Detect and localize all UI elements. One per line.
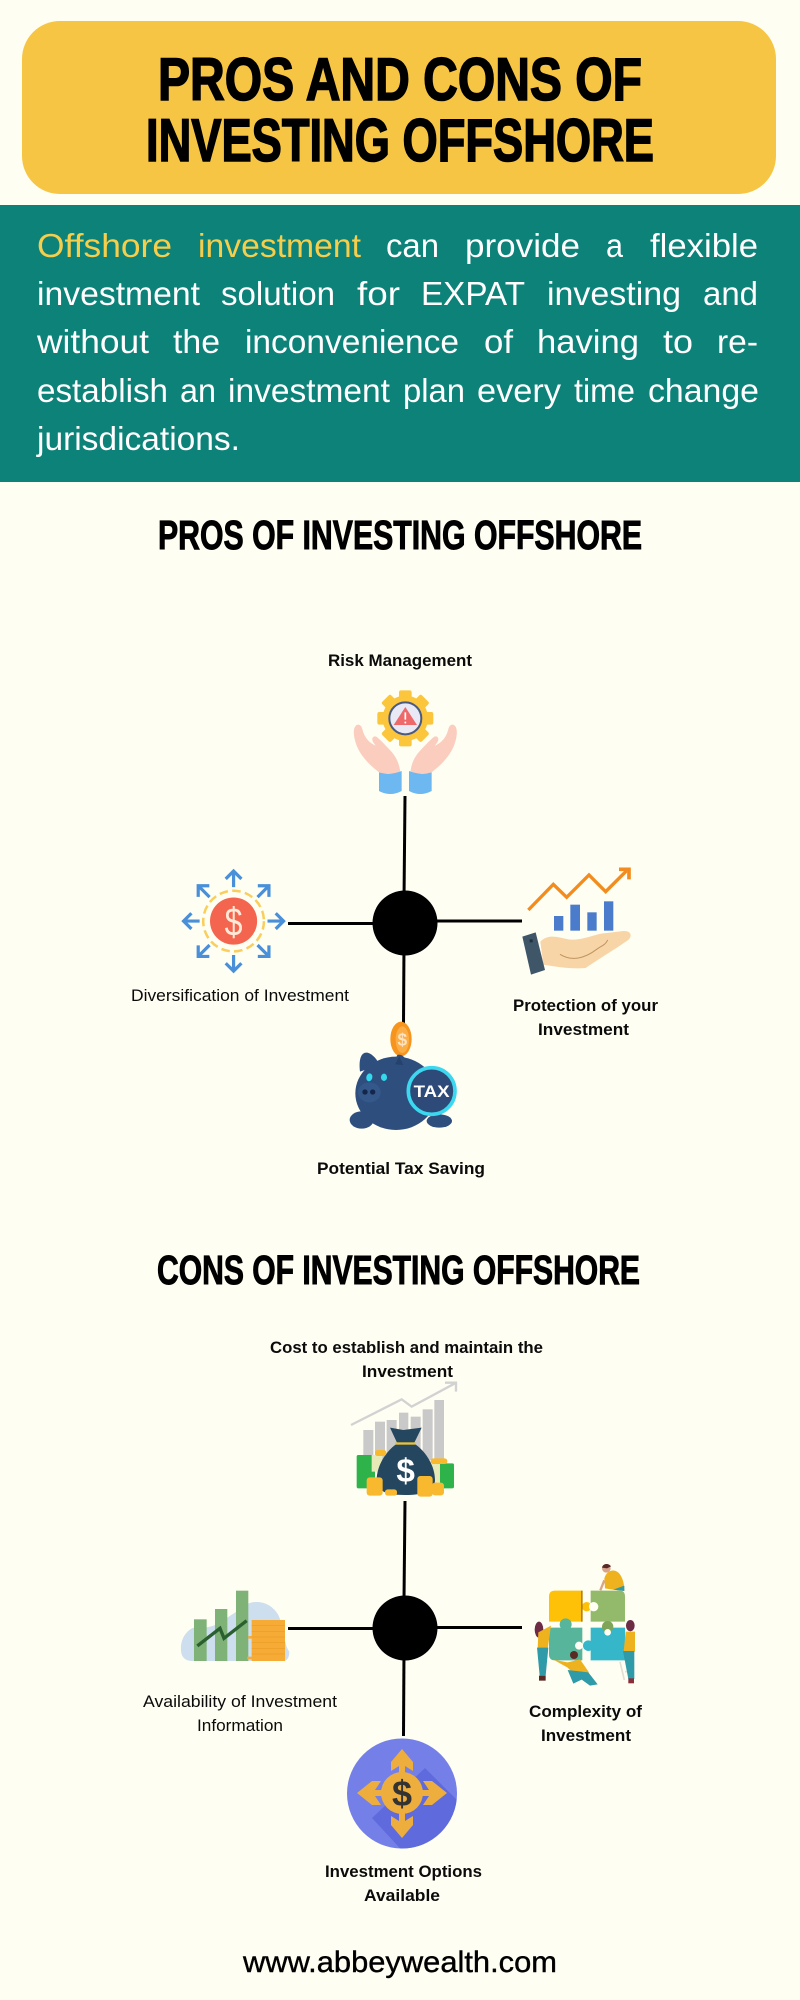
icon: protection hand with chart: [522, 869, 631, 975]
person bottom: [553, 1651, 598, 1686]
diagram: cons hub and spokes: [143, 1339, 643, 1905]
label: complexity: [529, 1703, 643, 1745]
label: availability: Information: [197, 1717, 283, 1735]
label: cost: Cost to establish and maintain the: [270, 1339, 543, 1357]
label: options: Investment Options: [325, 1863, 482, 1881]
hub connectors: [288, 1501, 522, 1736]
label: cost: [270, 1339, 543, 1381]
intro text block: flexible: [650, 227, 758, 264]
label: options: Available: [364, 1887, 440, 1905]
intro text block: for: [357, 275, 400, 312]
title: INVESTING OFFSHORE: [146, 107, 654, 174]
intro text block: plan: [403, 372, 465, 409]
label: protection: [513, 997, 659, 1039]
left hand: [354, 725, 402, 794]
icon: diversification dollar with arrows: [184, 871, 284, 971]
icon: tax piggy bank: $: [398, 1030, 408, 1050]
intro text block: Offshore: [37, 227, 172, 264]
intro text block: investing: [547, 275, 681, 312]
intro text block: jurisdications.: [36, 420, 240, 457]
intro text block: change: [648, 372, 759, 409]
heading: cons: CONS OF INVESTING OFFSHORE: [157, 1247, 640, 1293]
title panel: [22, 21, 776, 194]
icon: money bag with chart: $: [396, 1453, 415, 1490]
intro text block: inconvenience: [245, 323, 459, 360]
icon: availability bars and coins: [181, 1591, 289, 1661]
intro text block: to: [663, 323, 693, 360]
intro text block: having: [537, 323, 639, 360]
intro text block: re-: [717, 323, 758, 360]
icon: investment options: [347, 1738, 457, 1848]
intro text block: investment: [228, 372, 390, 409]
title: [146, 46, 654, 174]
intro text block: without: [36, 323, 149, 360]
intro text block: the: [173, 323, 220, 360]
intro text block: every: [477, 372, 562, 409]
icon: tax piggy bank: TAX: [414, 1082, 450, 1101]
intro text block: an: [180, 372, 216, 409]
label: diversification: Diversification of Investment: [131, 987, 349, 1005]
intro text block: can: [386, 227, 439, 264]
person left: [535, 1622, 551, 1681]
label: availability: [143, 1693, 337, 1735]
label: tax saving: Potential Tax Saving: [317, 1160, 485, 1178]
title: PROS AND CONS OF: [158, 46, 642, 113]
intro text block: of: [484, 323, 514, 360]
intro text block: a: [606, 227, 624, 264]
intro text block: [36, 227, 759, 457]
heading: pros: PROS OF INVESTING OFFSHORE: [158, 512, 642, 558]
panel: introduction: [0, 205, 800, 482]
icon: diversification dollar with arrows: $: [225, 900, 242, 944]
label: complexity: Investment: [541, 1727, 632, 1745]
intro text block: and: [703, 275, 758, 312]
person right: [620, 1620, 635, 1683]
intro text block: investment: [198, 227, 361, 264]
label: protection: Protection of your: [513, 997, 659, 1015]
label: complexity: Complexity of: [529, 1703, 643, 1721]
icon: investment options: $: [392, 1773, 412, 1814]
icon: risk management hands and gear: [354, 690, 457, 794]
intro text block: EXPAT: [421, 275, 525, 312]
right hand: [409, 725, 457, 794]
hub circle: [372, 1596, 438, 1660]
intro text block: establish: [37, 372, 168, 409]
person top: [600, 1564, 624, 1591]
label: protection: Investment: [538, 1021, 630, 1039]
diagram: pros hub and spokes: [131, 652, 659, 1178]
label: options: [325, 1863, 482, 1905]
icon: tax piggy bank: [350, 1022, 455, 1130]
hub connectors: [288, 796, 522, 1023]
label: availability: Availability of Investment: [143, 1693, 337, 1711]
icon: puzzle team: [535, 1564, 635, 1686]
intro text block: provide: [465, 227, 580, 264]
label: risk management: Risk Management: [328, 652, 473, 670]
intro text block: solution: [221, 275, 335, 312]
hub circle: [372, 890, 438, 956]
icon: money bag with chart: [351, 1383, 456, 1497]
intro text block: investment: [37, 275, 200, 312]
website link: www.abbeywealth.com: [242, 1946, 557, 1979]
label: cost: Investment: [362, 1363, 454, 1381]
intro text block: time: [574, 372, 635, 409]
